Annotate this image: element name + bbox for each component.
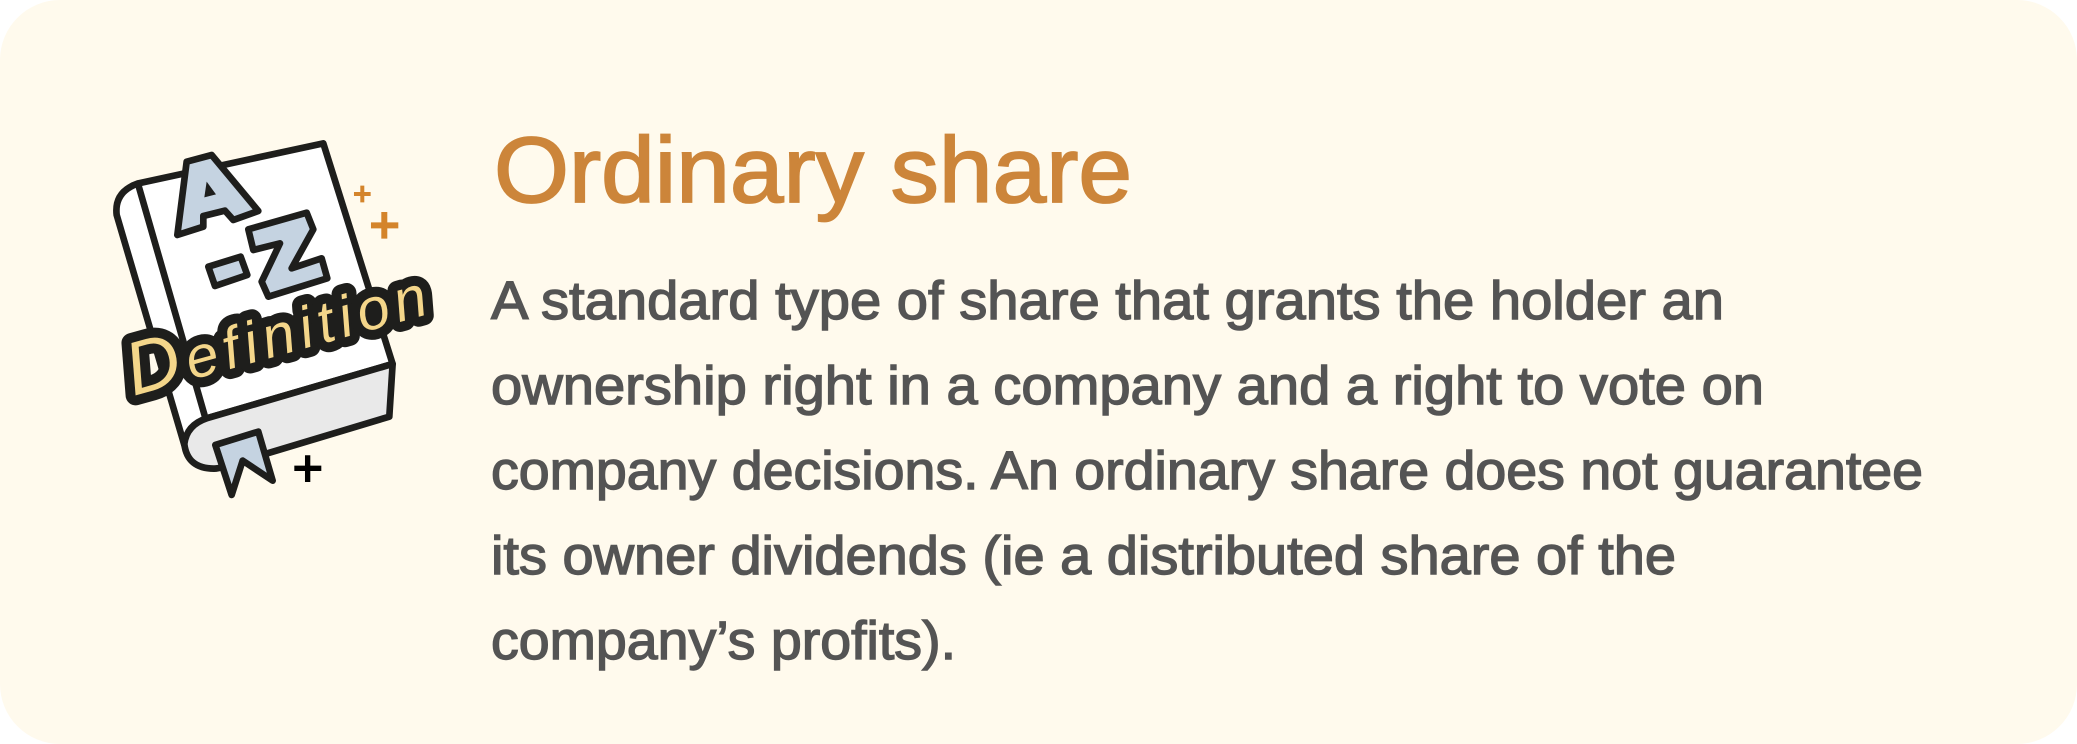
body text: company decisions. An ordinary share does not guarantee (491, 441, 1923, 501)
bookmark (215, 432, 273, 495)
dash (208, 257, 247, 286)
book spine line (138, 185, 205, 417)
body text: its owner dividends (ie a distributed share of the (491, 526, 1676, 586)
body text: company’s profits). (491, 611, 956, 671)
sparkle black (294, 455, 321, 482)
sparkle small orange (354, 186, 371, 202)
sparkle large orange (371, 212, 398, 239)
book pages (184, 364, 393, 469)
letter A (177, 155, 258, 235)
icon: definition book (115, 143, 435, 495)
letter Z (248, 213, 327, 297)
script lettering: Definition (115, 248, 435, 411)
body text: A standard type of share that grants the holder an (491, 271, 1724, 331)
body text: ownership right in a company and a right to vote on (491, 356, 1764, 416)
book cover (116, 143, 393, 445)
title: Ordinary share (494, 118, 1132, 222)
letter A counter (204, 182, 216, 197)
body text (491, 271, 1923, 671)
